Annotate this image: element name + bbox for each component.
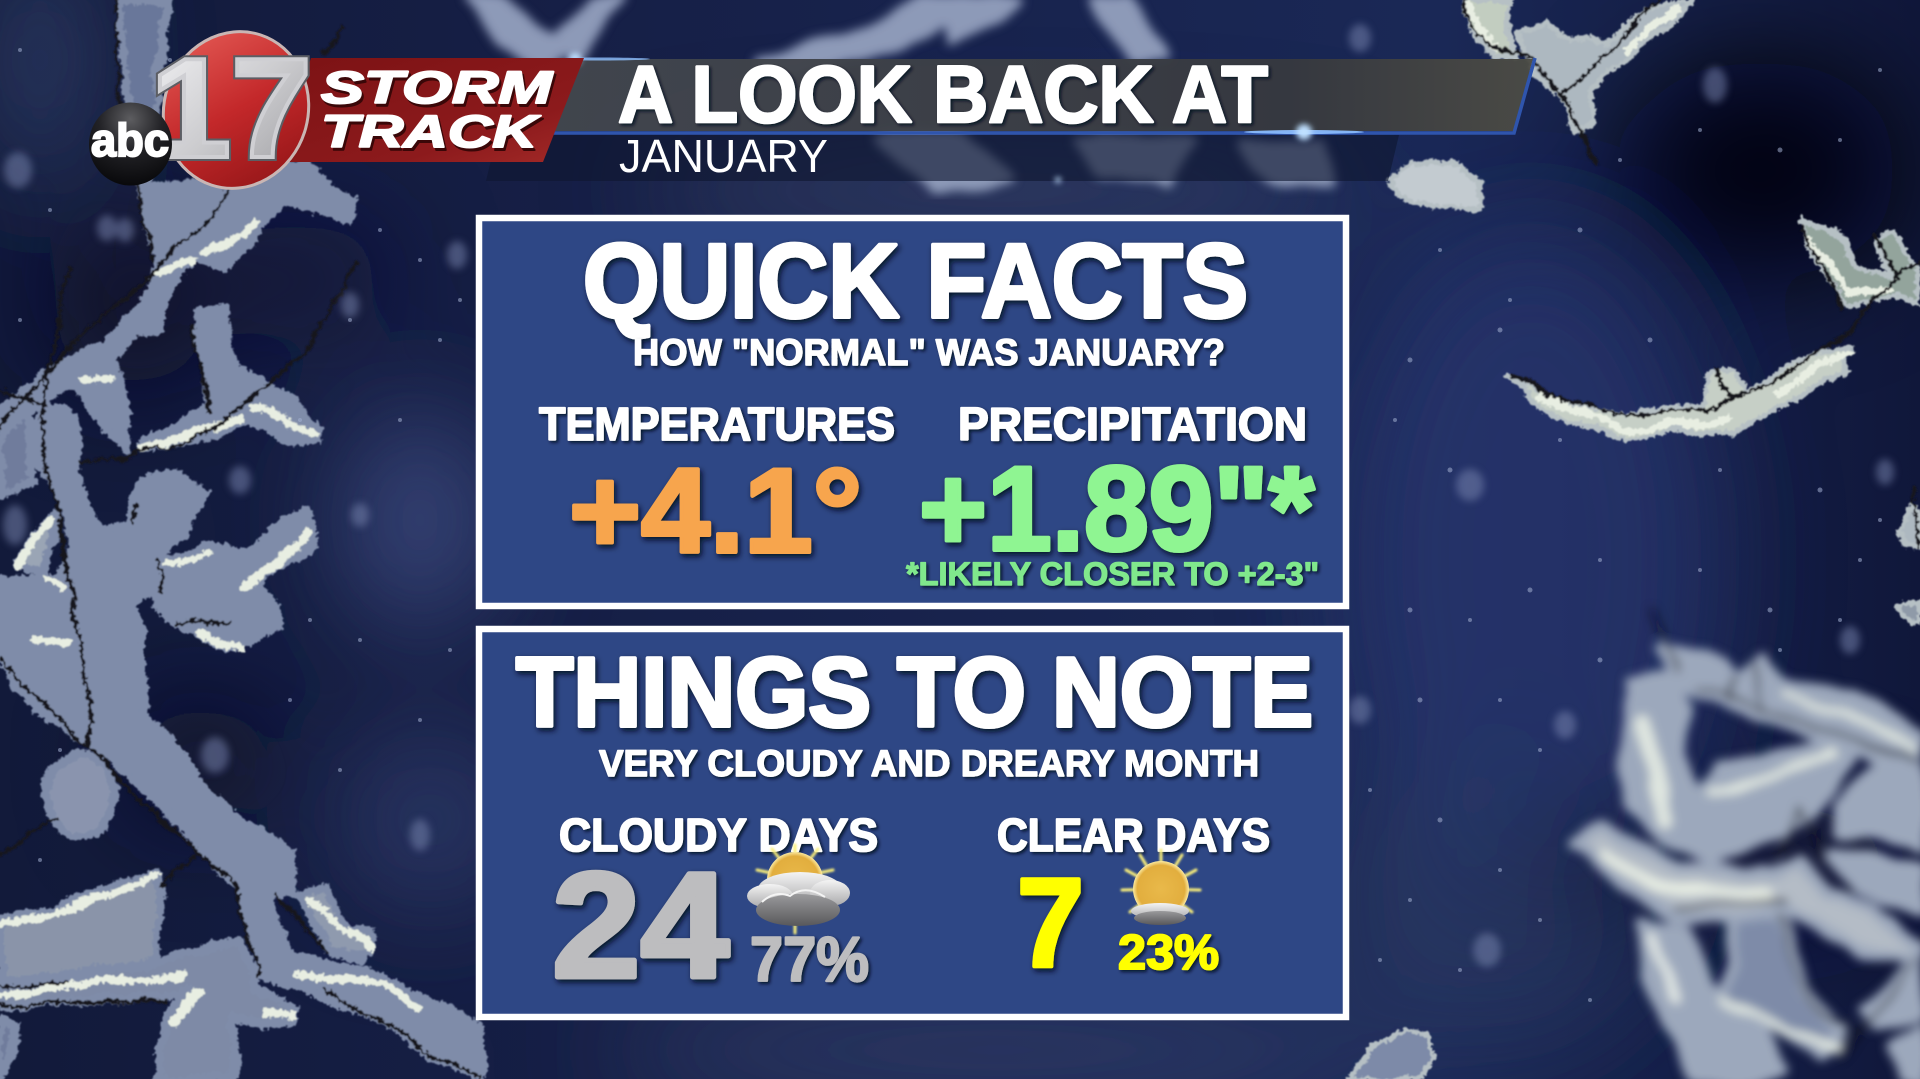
header: title bars: [486, 50, 1535, 183]
icon: sun behind cloud: [747, 845, 850, 933]
heading: quick facts: QUICK FACTS: [583, 223, 1248, 340]
channel number: 17: [150, 29, 312, 188]
panel background: [479, 218, 1346, 606]
lens glints: [550, 53, 1364, 183]
panel background: [479, 629, 1346, 1017]
value: cloudy percent: 77%: [750, 925, 869, 995]
logo: ABC 17 Storm Track: [89, 13, 584, 207]
right snowy branches: [1350, 0, 1920, 1079]
lower-right out-of-focus snowy branches: [1575, 609, 1920, 1079]
value: clear percent: 23%: [1118, 926, 1219, 980]
blue accent line: [548, 58, 1535, 133]
panel: quick facts: [479, 218, 1346, 606]
abc ball: [89, 102, 172, 186]
label: temperatures: TEMPERATURES: [539, 398, 895, 450]
headline: A LOOK BACK AT: [618, 50, 1268, 140]
storm wordmark: STORM: [321, 62, 554, 113]
label: clear days: CLEAR DAYS: [997, 809, 1270, 861]
sub headline: JANUARY: [619, 130, 828, 182]
main title bar: [553, 59, 1533, 131]
abc wordmark: abc: [91, 114, 169, 166]
value: cloudy days count: 24: [552, 841, 729, 1009]
channel number: 17: [150, 29, 312, 188]
footnote: *LIKELY CLOSER TO +2-3": [906, 556, 1319, 592]
subheading: HOW "NORMAL" WAS JANUARY?: [633, 332, 1225, 373]
sub title bar: [486, 135, 1399, 181]
value: precipitation anomaly: +1.89"*: [919, 442, 1314, 576]
icon: sun with small cloud: [1122, 850, 1200, 925]
track wordmark: TRACK: [321, 106, 542, 157]
left snowy branch: [0, 0, 480, 1079]
red circle: [143, 13, 329, 207]
panel: things to note: [479, 629, 1346, 1017]
label: precipitation: PRECIPITATION: [958, 398, 1307, 450]
heading: things to note: THINGS TO NOTE: [516, 637, 1313, 747]
label: cloudy days: CLOUDY DAYS: [559, 809, 878, 861]
subheading: VERY CLOUDY AND DREARY MONTH: [599, 743, 1259, 784]
red storm track banner: [275, 58, 584, 162]
value: clear days count: 7: [1017, 852, 1084, 993]
value: temperature anomaly: +4.1°: [569, 444, 862, 578]
top centre blurred snow: [470, 0, 1330, 190]
